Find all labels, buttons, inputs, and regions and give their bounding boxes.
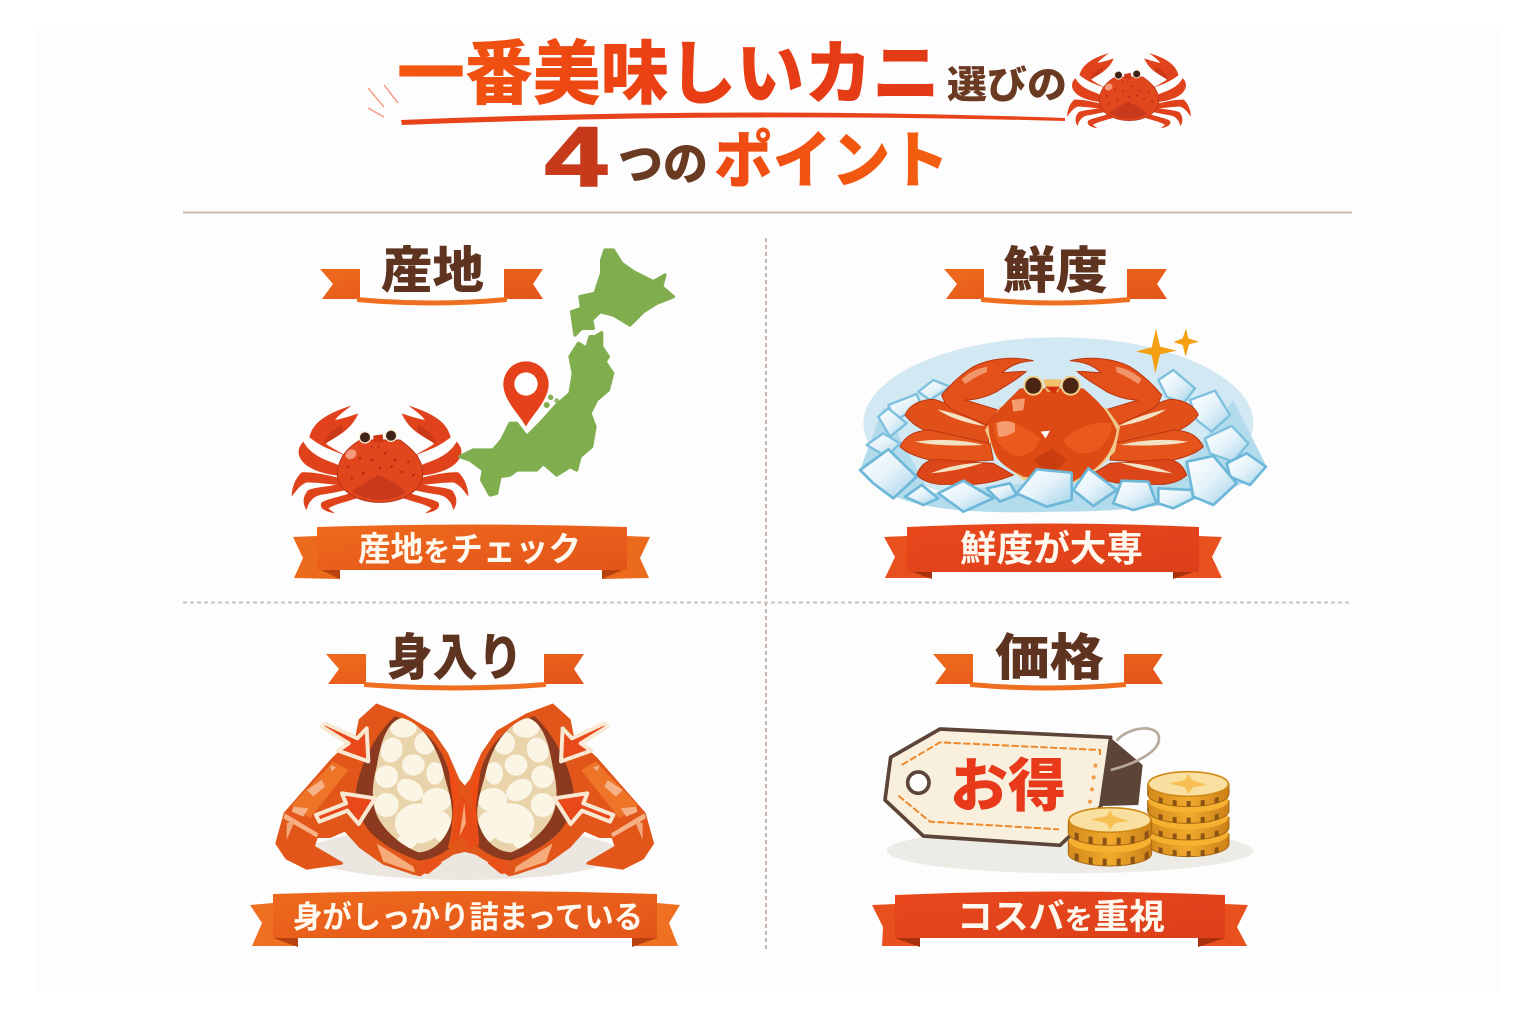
- heading ribbon: meat fill: [326, 630, 584, 690]
- title line one: 一番美味しいカニ: [397, 35, 940, 113]
- shadow: [887, 828, 1253, 873]
- ribbon: check origin: 産地をチェック: [358, 531, 581, 569]
- ribbon: meat packed: [250, 891, 680, 947]
- title number 4: 4: [545, 110, 607, 204]
- heading ribbon: freshness: 鮮度: [1003, 243, 1108, 299]
- illustration: crab on ice: [860, 328, 1267, 512]
- heading ribbon: freshness: [944, 243, 1167, 306]
- crab shell: [985, 376, 1120, 485]
- right coin emblem: [1169, 774, 1207, 794]
- crab limbs left: [900, 358, 1033, 484]
- right coin stack: [1148, 772, 1229, 857]
- title block: [368, 35, 1191, 204]
- right shell: [449, 705, 653, 875]
- illustration: price tag and coins: [885, 728, 1253, 873]
- ribbon: freshness matters: [884, 524, 1222, 579]
- panel: origin: [292, 243, 673, 579]
- tag back: [1102, 737, 1143, 806]
- left coin emblem: [1091, 810, 1129, 830]
- panel: price: [872, 630, 1253, 947]
- tag text: お得: [950, 754, 1066, 819]
- heading ribbon: price: [933, 630, 1163, 690]
- ribbon: freshness matters: 鮮度が大専: [960, 528, 1143, 569]
- panel: freshness: [860, 243, 1267, 579]
- back ice: [867, 370, 1248, 462]
- tag string: [1111, 728, 1159, 770]
- panel: meat fill: [250, 630, 680, 947]
- tag stitching: [898, 742, 1100, 829]
- ribbon: value for money: コスバを重視: [957, 898, 1165, 937]
- heading ribbon: price: 価格: [995, 630, 1104, 686]
- ribbon: check origin: [293, 524, 650, 579]
- icon: title crab: [1067, 53, 1191, 128]
- ribbon: meat packed: 身がしっかり詰まっている: [293, 900, 643, 935]
- map of Japan: [460, 250, 673, 495]
- title underline: [401, 112, 1065, 125]
- illustration: split crab shells: [277, 705, 653, 880]
- title small text two: つの: [618, 138, 708, 190]
- heading ribbon: origin: [320, 243, 543, 306]
- heading ribbon: meat fill: 身入り: [387, 630, 523, 686]
- ice oval: [863, 337, 1253, 509]
- tag front: [885, 729, 1111, 845]
- icon: crab: [292, 406, 468, 513]
- shadow: [307, 827, 620, 880]
- sparkles: [1136, 328, 1199, 373]
- icon: location pin: [503, 361, 549, 427]
- ice base: [860, 400, 1267, 512]
- grid dividers: [183, 212, 1352, 950]
- tag hole: [908, 772, 929, 793]
- title line two: ポイント: [714, 127, 949, 196]
- ribbon: value for money: [872, 892, 1248, 947]
- title small text: 選びの: [947, 65, 1067, 107]
- heading ribbon: origin: 産地: [381, 243, 484, 299]
- left shell: [277, 705, 480, 875]
- crab limbs right: [1070, 358, 1203, 484]
- left coin stack: [1068, 808, 1152, 866]
- motion lines: [368, 85, 398, 117]
- front ice: [860, 449, 1266, 512]
